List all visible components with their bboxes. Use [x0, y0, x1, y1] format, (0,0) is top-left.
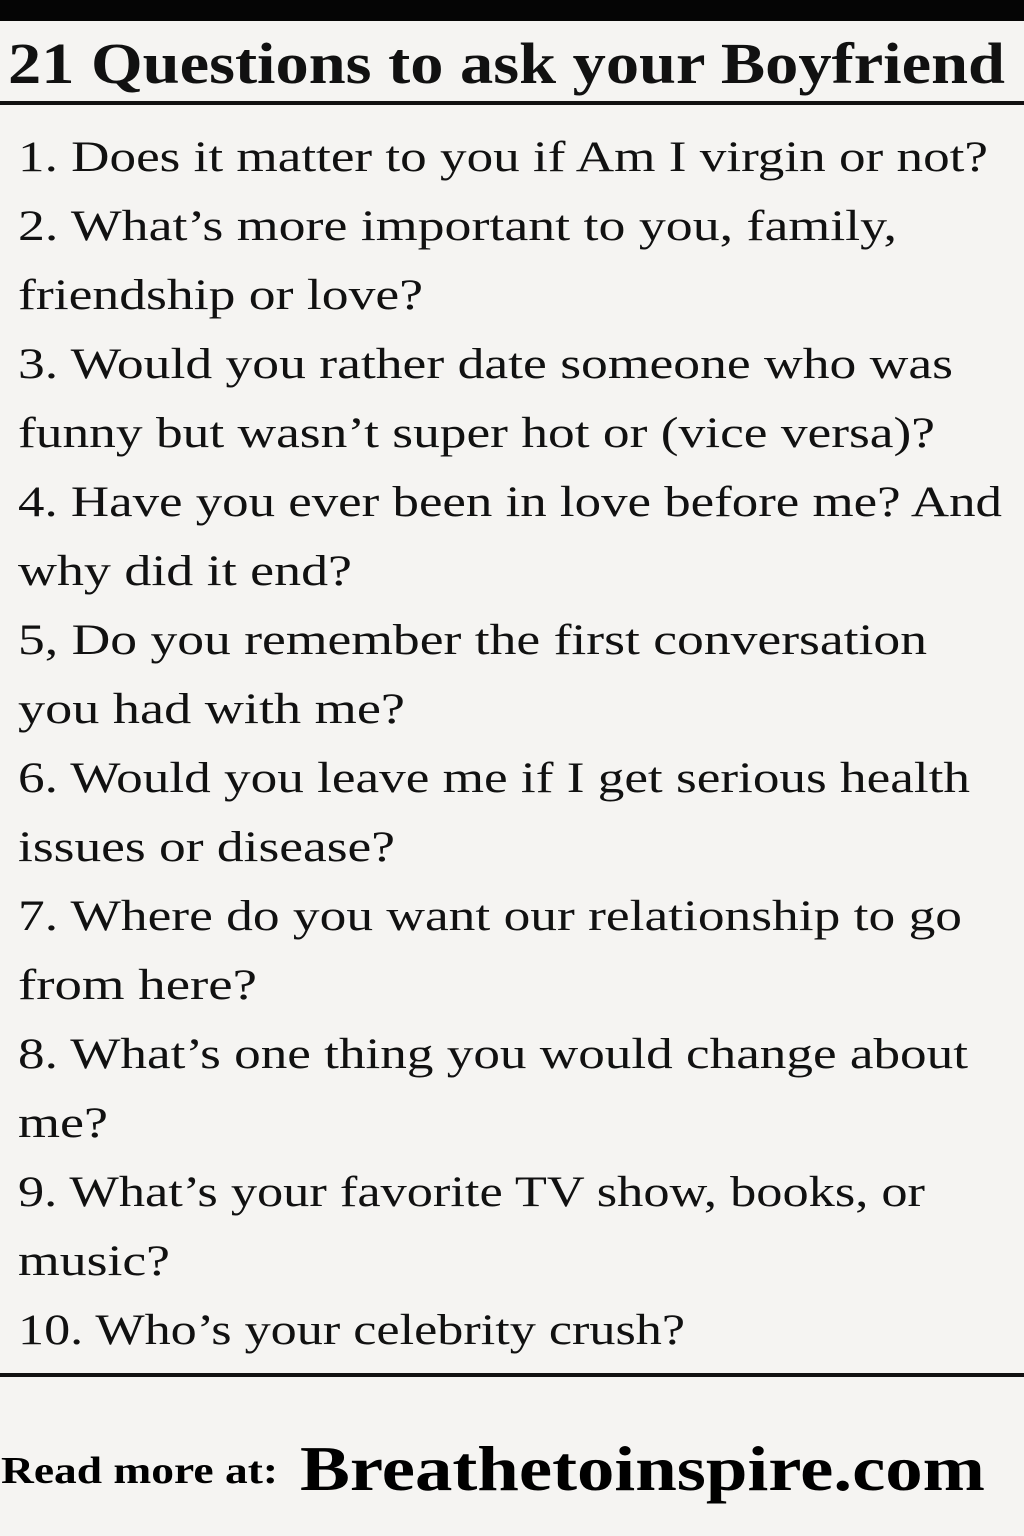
questions list: me? [18, 1100, 108, 1147]
top black bar [0, 0, 1024, 21]
questions list [18, 134, 1002, 1354]
questions list: friendship or love? [18, 272, 423, 319]
questions list: 7. Where do you want our relationship to go [18, 893, 962, 940]
title: 21 Questions to ask your Boyfriend [8, 31, 1005, 96]
questions list: funny but wasn’t super hot or (vice versa)? [18, 410, 935, 457]
footer: read more: Read more at: [1, 1450, 278, 1492]
questions list: 8. What’s one thing you would change about [18, 1031, 968, 1078]
footer: read more: Breathetoinspire.com [300, 1433, 985, 1504]
questions list: from here? [18, 962, 257, 1009]
questions list: 2. What’s more important to you, family, [18, 203, 897, 250]
questions list: 3. Would you rather date someone who was [18, 341, 953, 388]
questions list: 5, Do you remember the first conversation [18, 617, 927, 664]
questions list: music? [18, 1238, 170, 1285]
questions list: why did it end? [18, 548, 352, 595]
questions list: 9. What’s your favorite TV show, books, or [18, 1169, 925, 1216]
questions list: 10. Who’s your celebrity crush? [18, 1307, 685, 1354]
questions list: 4. Have you ever been in love before me? And [18, 479, 1002, 526]
questions list: issues or disease? [18, 824, 395, 871]
questions list: you had with me? [18, 686, 405, 733]
questions list: 6. Would you leave me if I get serious health [18, 755, 970, 802]
footer: read more [1, 1433, 985, 1504]
questions list: 1. Does it matter to you if Am I virgin or not? [18, 134, 988, 181]
